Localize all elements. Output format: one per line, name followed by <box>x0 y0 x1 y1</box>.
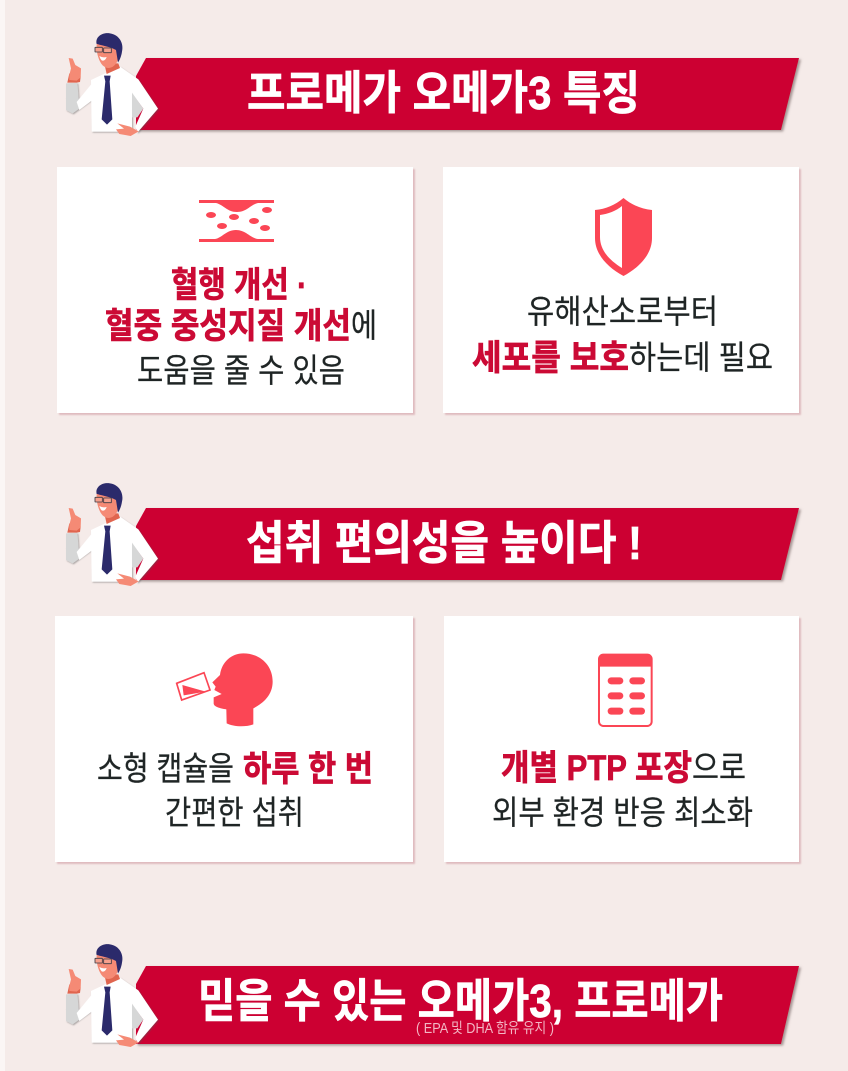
icon: head taking capsule <box>177 653 273 726</box>
panel: PTP packaging <box>444 616 799 862</box>
text: individual PTP packaging: 으로 <box>692 749 746 786</box>
text: blood circulation benefit: 에 <box>351 307 377 344</box>
text: once-a-day small capsule: 소형 캡슐을 <box>97 750 234 787</box>
text: individual PTP packaging: 개별 PTP 포장 <box>501 749 692 788</box>
text: blood circulation benefit: 혈행 개선 · <box>171 266 307 305</box>
banner: trusted omega-3 <box>136 966 799 1044</box>
icon: presenter man 2 <box>66 483 158 586</box>
panel: blood circulation <box>57 167 413 413</box>
text: cell protection benefit <box>472 293 773 378</box>
text: once-a-day small capsule: 하루 한 번 <box>243 750 373 789</box>
text: once-a-day small capsule <box>97 750 373 831</box>
text: blood circulation benefit: 혈중 중성지질 개선 <box>105 307 351 346</box>
text: blood circulation benefit: 도움을 줄 수 있음 <box>137 352 345 389</box>
text: blood circulation benefit <box>105 266 377 389</box>
text: cell protection benefit: 세포를 보호 <box>472 339 629 378</box>
heading: convenient intake: 섭취 편의성을 높이다 ! <box>246 517 642 569</box>
icon: blood vessel <box>199 200 274 242</box>
text: cell protection benefit: 하는데 필요 <box>629 339 773 376</box>
heading: product features: 프로메가 오메가3 특징 <box>247 67 640 119</box>
text: individual PTP packaging: 외부 환경 반응 최소화 <box>492 794 753 831</box>
text: individual PTP packaging <box>492 749 753 831</box>
icon: PTP blister pack <box>599 655 652 726</box>
panel: cell protection <box>443 167 799 413</box>
panel: small capsule <box>55 616 413 862</box>
icon: shield <box>595 198 652 276</box>
banner: product features <box>136 58 799 130</box>
icon: presenter man 1 <box>66 33 158 136</box>
icon: presenter man 3 <box>66 944 158 1047</box>
heading: trusted omega-3: 믿을 수 있는 오메가3, 프로메가 <box>198 975 723 1027</box>
text: once-a-day small capsule: 간편한 섭취 <box>165 794 304 831</box>
text: cell protection benefit: 유해산소로부터 <box>527 293 718 330</box>
banner: convenient intake <box>136 508 799 580</box>
footnote: EPA and DHA: ( EPA 및 DHA 함유 유지 ) <box>416 1020 554 1037</box>
